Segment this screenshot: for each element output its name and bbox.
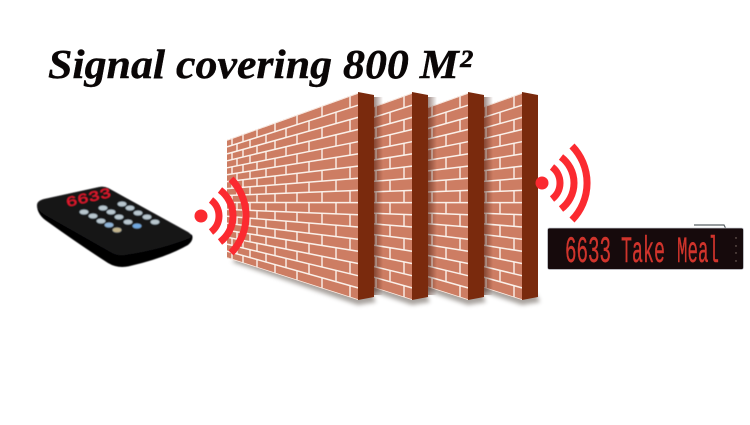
wall 4 cast shadow bbox=[484, 97, 493, 295]
antenna bbox=[694, 225, 726, 229]
wall 2 cast shadow bbox=[374, 97, 383, 295]
left signal waves bbox=[194, 179, 246, 253]
remote keys bbox=[79, 201, 160, 233]
title: Signal covering 800 M² bbox=[48, 41, 473, 87]
display message: Take bbox=[621, 232, 665, 274]
display message: 6633 bbox=[565, 232, 611, 274]
LED display receiver bbox=[548, 225, 744, 274]
brick wall 4 bbox=[391, 92, 540, 305]
right signal waves bbox=[536, 146, 587, 220]
indicator dots bbox=[735, 237, 737, 262]
brick wall 3 bbox=[337, 92, 486, 305]
wall 3 cast shadow bbox=[428, 97, 437, 295]
remote display digits: 6633 bbox=[65, 186, 113, 212]
remote keypad transmitter bbox=[37, 186, 192, 267]
display message bbox=[565, 232, 719, 274]
brick wall 1 bbox=[227, 92, 376, 305]
brick wall 2 bbox=[281, 92, 430, 305]
